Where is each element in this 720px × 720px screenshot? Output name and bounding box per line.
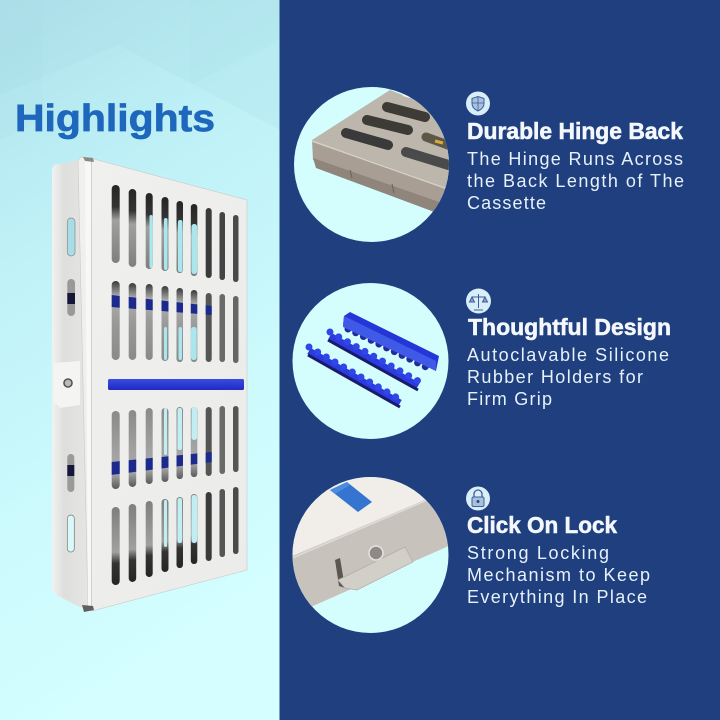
lock latch xyxy=(54,361,80,408)
feature: durable hinge back xyxy=(466,92,684,213)
body text: Firm Grip xyxy=(467,389,552,409)
slot row 1 xyxy=(112,185,238,282)
icon: balance tree xyxy=(466,288,491,314)
product: instrument cassette xyxy=(52,157,247,612)
body text: the Back Length of The xyxy=(467,171,684,191)
icon: padlock xyxy=(466,486,490,510)
heading: Thoughtful Design xyxy=(468,314,671,340)
cassette hinge strip and lid xyxy=(78,157,247,611)
panel: right navy background xyxy=(280,0,720,720)
body text xyxy=(467,149,684,213)
body text xyxy=(467,345,669,409)
title: Highlights xyxy=(15,98,215,140)
body text: Autoclavable Silicone xyxy=(467,345,669,365)
slot row 2 xyxy=(111,281,238,363)
icon: shield xyxy=(466,92,490,116)
holder: lower comb xyxy=(308,347,401,407)
panel: left light-blue background xyxy=(0,0,280,720)
body text: Mechanism to Keep xyxy=(467,565,650,585)
body text: Cassette xyxy=(467,193,546,213)
heading: Click On Lock xyxy=(467,512,617,538)
feature: thoughtful design xyxy=(466,288,671,409)
slot row 3 xyxy=(111,406,238,489)
photo circle: silicone rubber holders xyxy=(292,283,448,439)
body text: Strong Locking xyxy=(467,543,609,563)
blue silicone bar xyxy=(108,379,244,390)
heading: Durable Hinge Back xyxy=(467,118,683,144)
body text: The Hinge Runs Across xyxy=(467,149,683,169)
side window slots xyxy=(67,218,75,552)
holder: wide bar xyxy=(343,312,439,371)
holder: middle comb xyxy=(328,332,420,390)
photo circle: hinge close-up xyxy=(294,87,460,242)
body text: Rubber Holders for xyxy=(467,367,643,387)
cassette side wall xyxy=(52,160,91,610)
slot row 4 xyxy=(112,487,238,585)
body text: Everything In Place xyxy=(467,587,647,607)
photo circle: click-on lock xyxy=(292,477,448,633)
body text xyxy=(467,543,650,607)
feature: click on lock xyxy=(466,486,650,607)
